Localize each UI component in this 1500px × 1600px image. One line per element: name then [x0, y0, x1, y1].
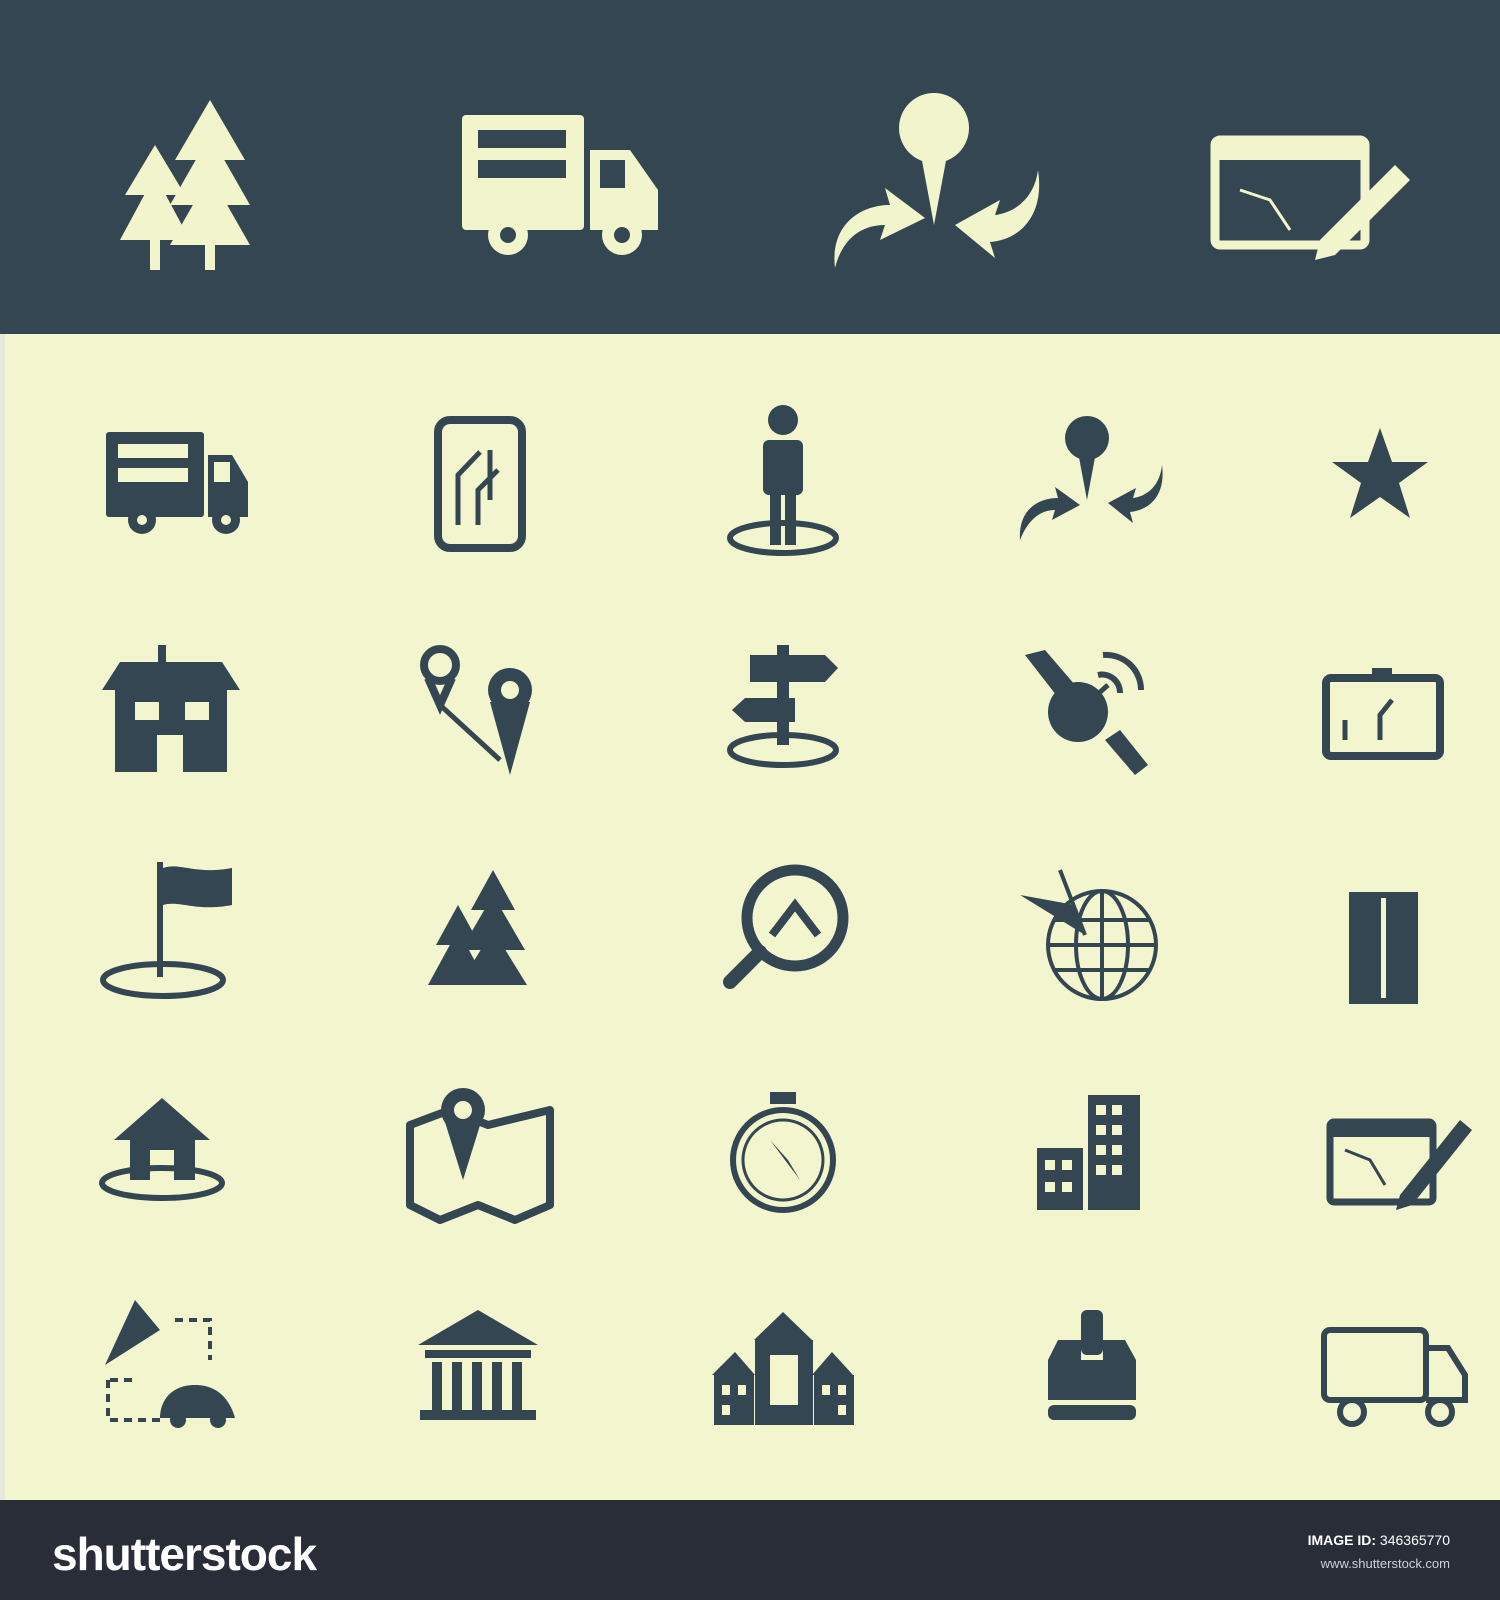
icon: star	[1332, 428, 1428, 518]
icon: phone navigation	[438, 420, 522, 548]
icon: flag	[103, 862, 232, 996]
icon: buildings	[1037, 1095, 1140, 1210]
icon: museum	[418, 1310, 538, 1420]
icon: pin with arrows	[1020, 416, 1163, 540]
icon: gps device	[1326, 668, 1440, 756]
logo text: shutterstock	[52, 1528, 317, 1580]
left border	[0, 334, 5, 1500]
icon: truck (light)	[462, 115, 658, 255]
website: www.shutterstock.com	[1320, 1556, 1450, 1571]
icon: van	[1324, 1330, 1465, 1424]
icon: signpost	[730, 645, 838, 765]
icon: house on spot	[102, 1098, 222, 1198]
icon: truck	[106, 432, 248, 534]
footer bar	[0, 1500, 1500, 1600]
icon: house with windows	[102, 645, 240, 772]
top band	[0, 0, 1500, 334]
icon: globe with arrow	[1020, 870, 1156, 999]
image id: IMAGE ID: 346365770	[1308, 1532, 1450, 1548]
icon: pin with arrows (light)	[834, 93, 1039, 268]
icon: satellite to car route	[105, 1300, 235, 1428]
icon: castle buildings	[712, 1312, 854, 1425]
icon: trees	[428, 870, 527, 985]
icon: bag/luggage	[1048, 1310, 1136, 1420]
icon: two pins route	[424, 649, 532, 775]
icon grid	[102, 405, 1472, 1428]
icon: trees (light)	[120, 100, 250, 270]
icon: calendar with pencil (light)	[1215, 140, 1410, 260]
icon: satellite	[1025, 650, 1148, 775]
icon: folded map with pin	[410, 1088, 550, 1220]
icon: magnifier compass	[730, 870, 843, 982]
icon: calendar pencil	[1330, 1120, 1472, 1210]
icon: person on spot	[730, 405, 836, 553]
icon: stopwatch compass	[733, 1092, 833, 1210]
icon: road	[1349, 892, 1418, 1004]
